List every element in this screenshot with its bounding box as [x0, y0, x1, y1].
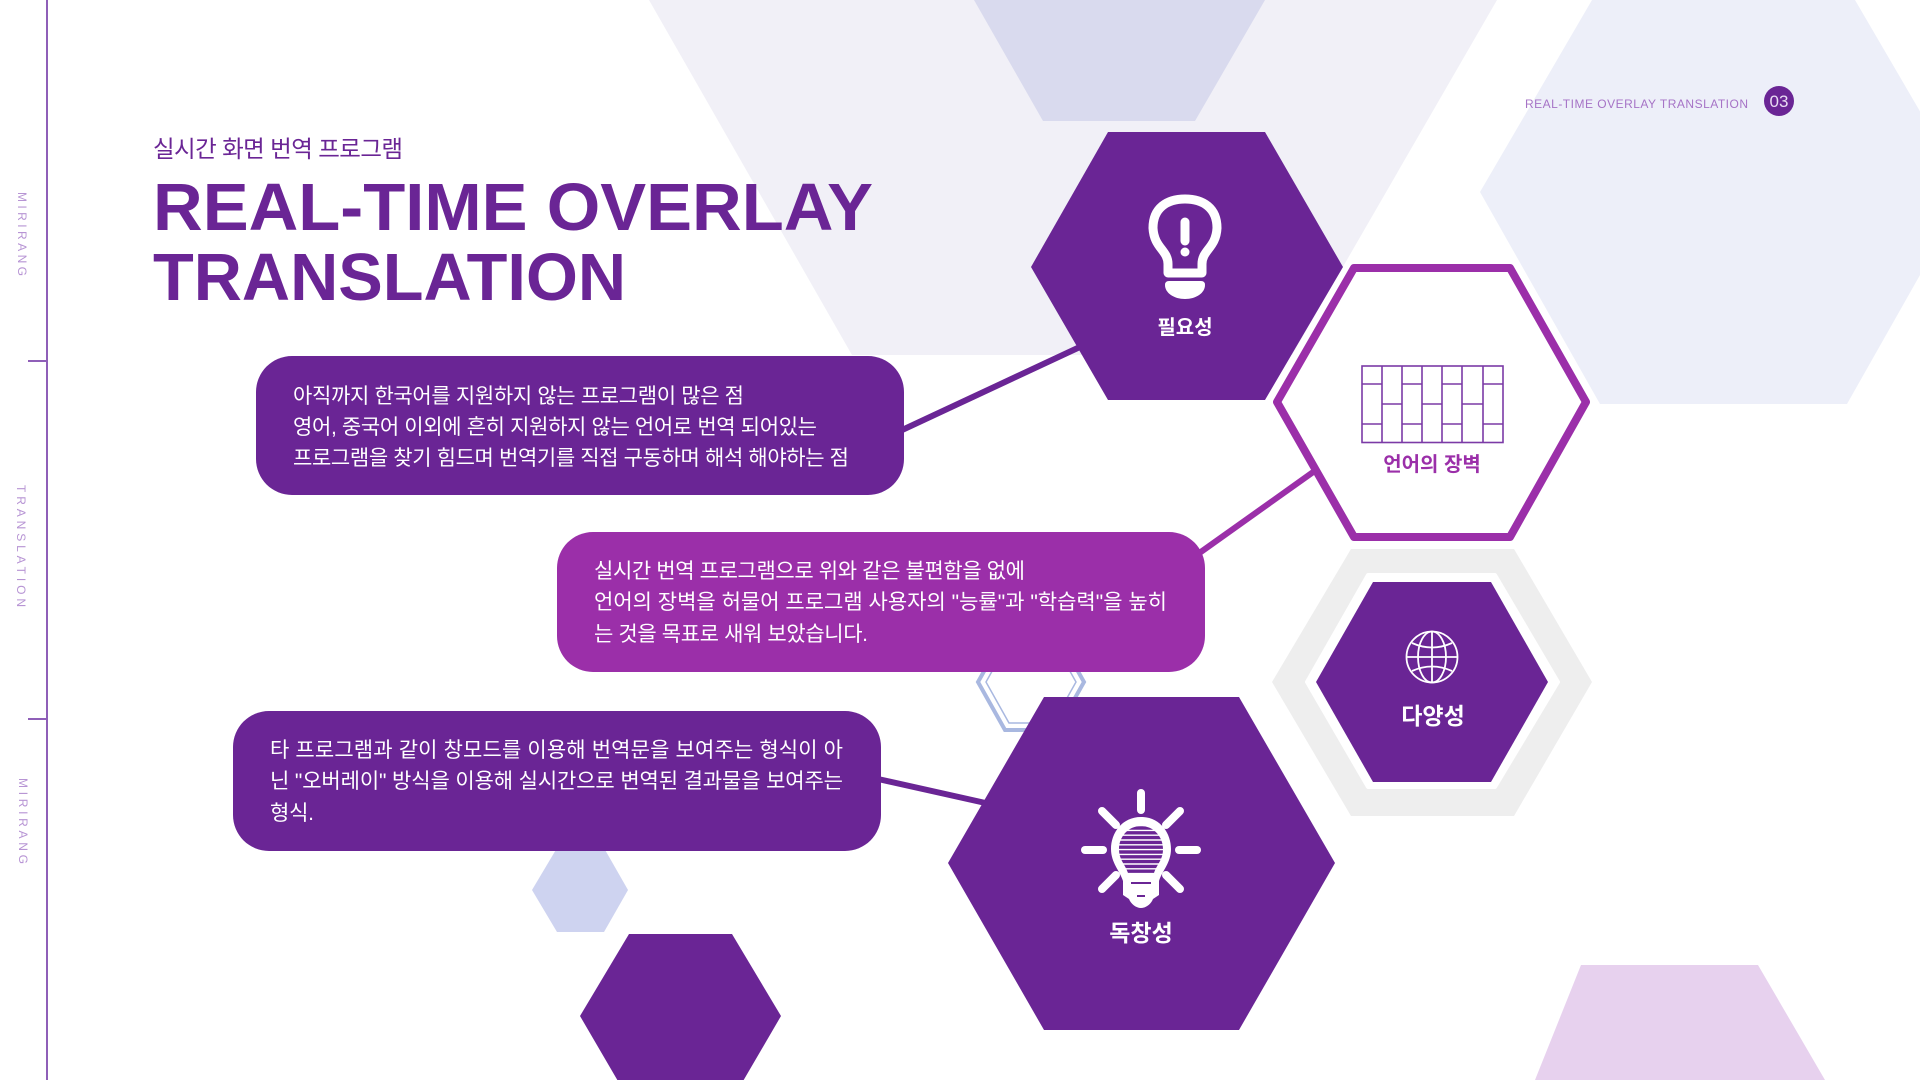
- callout: language barrier: 는 것을 목표로 새워 보았습니다.: [594, 623, 868, 646]
- page number badge: [1764, 86, 1794, 116]
- background hexagon: bottom right pink: [1535, 965, 1825, 1080]
- callout: uniqueness: [233, 711, 881, 851]
- callout: uniqueness: 형식.: [270, 802, 314, 825]
- connector: barrier callout to hexagon: [1198, 470, 1316, 554]
- label: language barrier: 언어의 장벽: [1383, 453, 1481, 476]
- callout: need: [256, 356, 904, 495]
- small periwinkle hexagon: [532, 848, 628, 932]
- callout: need: 아직까지 한국어를 지원하지 않는 프로그램이 많은 점: [293, 385, 744, 408]
- callout: language barrier: [557, 532, 1205, 672]
- background hexagon: large pale lilac: [649, 0, 1497, 355]
- callout: language barrier: 실시간 번역 프로그램으로 위와 같은 불편함을 없에: [594, 560, 1025, 583]
- background hexagon: right pale blue: [1480, 0, 1920, 404]
- connector: need callout to hexagon: [900, 346, 1082, 431]
- small purple hexagon: [580, 934, 781, 1080]
- subtitle: 실시간 화면 번역 프로그램: [153, 136, 403, 162]
- label: uniqueness: 독창성: [1109, 920, 1173, 946]
- rail label: mirirang bottom: MIRIRANG: [16, 778, 30, 864]
- label: need: 필요성: [1157, 316, 1213, 339]
- page number badge: 03: [1770, 92, 1788, 111]
- callout: need: 영어, 중국어 이외에 흔히 지원하지 않는 언어로 번역 되어있는: [293, 416, 817, 439]
- header tag: REAL-TIME OVERLAY TRANSLATION: [1525, 97, 1748, 111]
- decorative outlined hexagon: [978, 634, 1084, 730]
- title: REAL-TIME OVERLAY: [153, 170, 873, 245]
- callout: uniqueness: 닌 "오버레이" 방식을 이용해 실시간으로 변역된 결과물을 보여주는: [270, 770, 843, 793]
- title: TRANSLATION: [153, 240, 626, 315]
- header tag: [1525, 86, 1794, 116]
- rail label: mirirang top: MIRIRANG: [15, 192, 29, 276]
- rail label: translation: TRANSLATION: [14, 485, 28, 607]
- hexagon: need: [1031, 132, 1343, 400]
- title: [153, 170, 873, 315]
- icon: brick wall: [1362, 366, 1503, 443]
- callout: need: 프로그램을 찾기 힘드며 번역기를 직접 구동하며 해석 해야하는 점: [293, 447, 849, 470]
- background hexagon: top periwinkle: [974, 0, 1265, 121]
- left rail: [14, 0, 48, 1080]
- icon: shining light bulb: [1085, 793, 1197, 908]
- label: diversity: 다양성: [1401, 703, 1465, 729]
- hexagon: language barrier: [1277, 268, 1586, 537]
- callout: language barrier: 언어의 장벽을 허물어 프로그램 사용자의 "능률"과 "학습력"을 높히: [594, 591, 1167, 614]
- hexagon: diversity: [1272, 549, 1592, 816]
- callout: uniqueness: 타 프로그램과 같이 창모드를 이용해 번역문을 보여주는 형식이 아: [270, 739, 843, 762]
- connector: uniqueness callout to hexagon: [878, 779, 990, 804]
- icon: globe: [1406, 632, 1458, 682]
- icon: light bulb with exclamation: [1153, 199, 1217, 299]
- hexagon: uniqueness: [948, 697, 1335, 1030]
